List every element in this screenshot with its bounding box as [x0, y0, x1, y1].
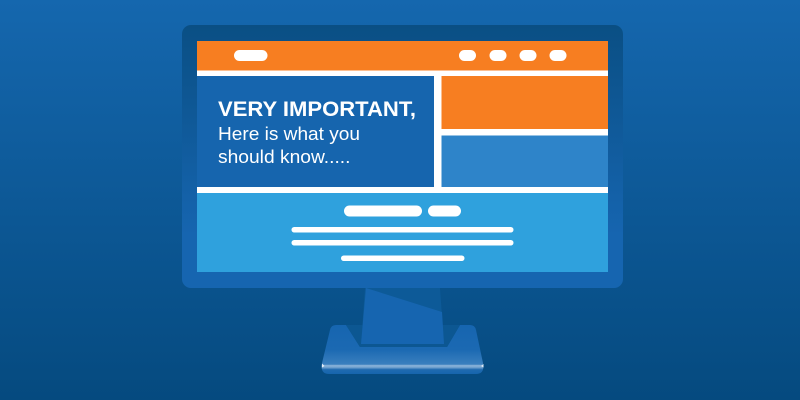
- lower content panel: [197, 193, 608, 272]
- logo pill: [234, 50, 268, 61]
- subheading line two: should know.....: [218, 146, 350, 167]
- stand neck shaded back: [361, 288, 444, 344]
- monitor stand: [322, 288, 484, 374]
- hero panel: [197, 76, 434, 187]
- monitor: [182, 25, 623, 288]
- subheading line one: Here is what you: [218, 123, 360, 144]
- stand neck lit face: [361, 288, 444, 344]
- blue side panel: [442, 136, 608, 187]
- stand base recess: [346, 325, 460, 347]
- text lines: [292, 227, 514, 261]
- screen white backing: [197, 41, 608, 272]
- stand base: [322, 325, 483, 374]
- monitor bezel: [182, 25, 623, 288]
- heading: VERY IMPORTANT,: [218, 97, 416, 121]
- screen: [197, 41, 608, 272]
- orange side panel: [442, 76, 608, 129]
- headline pills: [344, 206, 461, 216]
- base corner highlights: [322, 364, 484, 368]
- navigation bar: [197, 41, 608, 70]
- menu pills: [459, 50, 566, 61]
